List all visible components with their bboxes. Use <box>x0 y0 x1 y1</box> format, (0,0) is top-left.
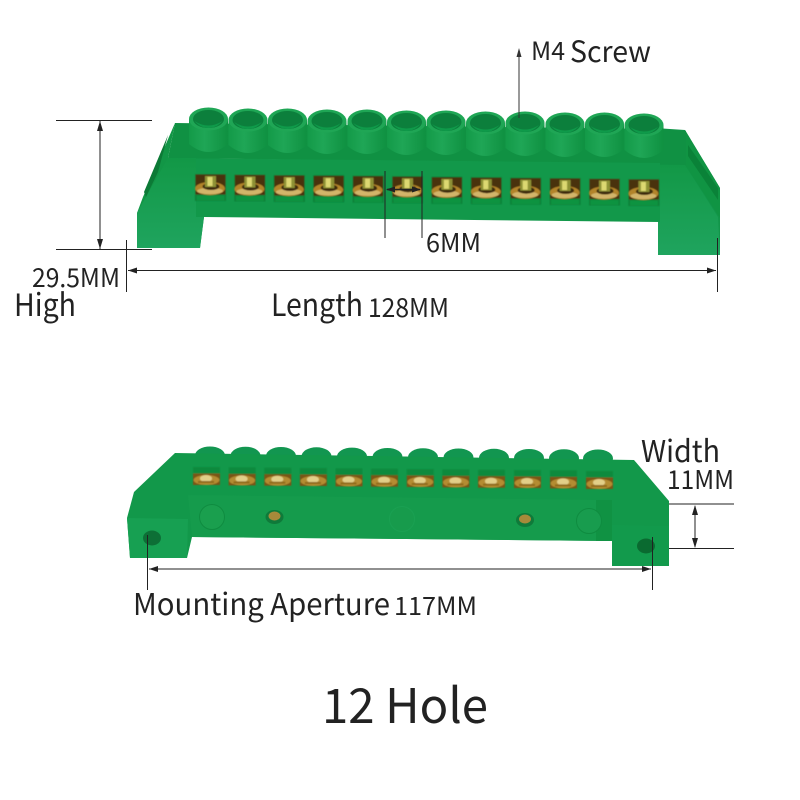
length label: Length <box>271 280 363 325</box>
6MM pitch dimension <box>385 171 422 238</box>
product photo: rear view of terminal bar <box>127 446 669 566</box>
length label <box>271 280 449 325</box>
right end flange <box>640 127 720 255</box>
title: 12 Hole: 12 Hole <box>322 667 488 737</box>
product photo: top view of terminal bar <box>137 108 720 255</box>
12 rounded post tops <box>195 446 613 468</box>
mounting aperture label: Mounting Aperture <box>133 580 390 624</box>
M4 screw label <box>531 29 651 71</box>
mounting aperture dimension <box>148 535 652 590</box>
right end block face <box>612 525 669 566</box>
bar top surface <box>168 123 686 165</box>
width dimension <box>669 504 734 548</box>
mounting aperture label: 117MM <box>394 587 477 623</box>
length dimension <box>126 238 718 292</box>
height dimension <box>56 120 152 250</box>
length label: 128MM <box>368 288 449 325</box>
M4 screw label: Screw <box>570 29 651 71</box>
12 brass slots <box>193 467 613 489</box>
width label: Width <box>641 427 720 471</box>
left end block face <box>127 518 188 558</box>
height label <box>14 258 120 325</box>
mounting holes and moulded circles <box>143 504 655 554</box>
bar front face <box>168 158 660 222</box>
height label: 29.5MM <box>32 258 120 295</box>
width label: 11MM <box>667 460 734 497</box>
bar body <box>127 453 669 566</box>
6MM label: 6MM <box>426 223 481 260</box>
M4 screw arrow <box>516 48 522 118</box>
12 cylindrical screw posts <box>189 108 664 158</box>
left end flange <box>137 123 210 248</box>
M4 screw label: M4 <box>531 32 565 68</box>
bar front face <box>188 495 612 541</box>
12 brass screw slots <box>195 174 659 206</box>
width label <box>641 427 734 497</box>
height label: High <box>14 280 76 325</box>
